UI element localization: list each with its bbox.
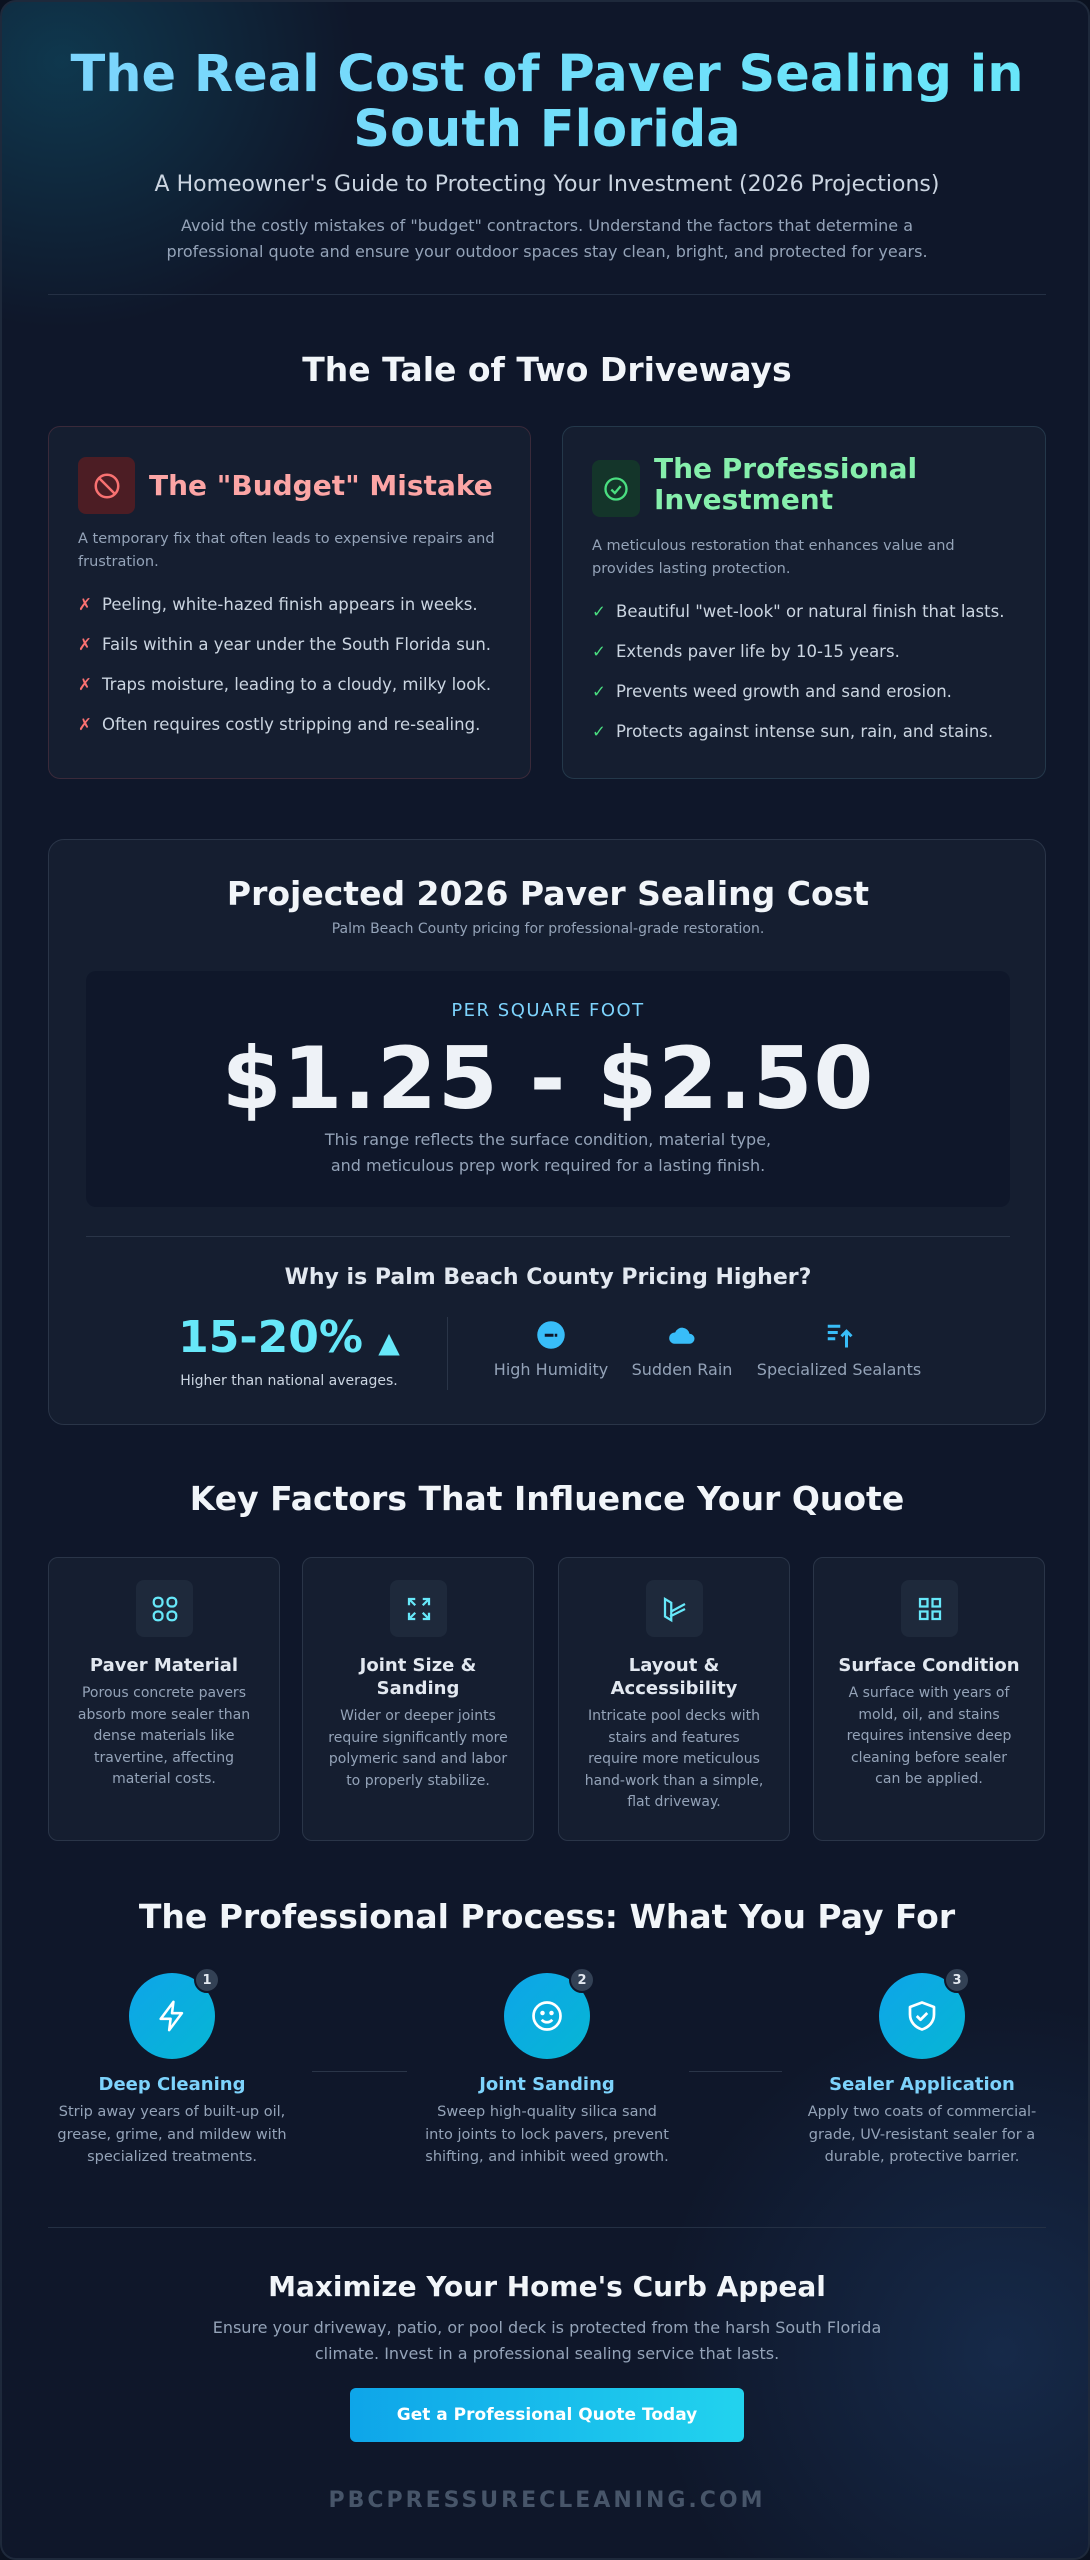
- step 2: Sweep high-quality silica sand: [437, 2104, 657, 2120]
- factor: joint size: Wider or deeper joints require significantly more polymeric sand and labor to properly stabilize.: [328, 1708, 508, 1788]
- panel: budget mistake: [48, 426, 531, 779]
- title: South Florida: [353, 100, 741, 159]
- icon: sealants: [757, 1324, 921, 1379]
- title: [2, 47, 1090, 157]
- list: problems: ✗: [78, 675, 92, 694]
- list: problems: ✗: [78, 715, 92, 734]
- cost subheading: Palm Beach County pricing for professional-grade restoration.: [332, 921, 764, 937]
- factor: layout: Intricate pool decks with stairs and features require more meticulous hand-work than a simple, flat driveway.: [585, 1708, 763, 1810]
- step 3: durable, protective barrier.: [825, 2149, 1019, 2165]
- card description: A temporary fix that often leads to expensive repairs and frustration.: [78, 531, 495, 570]
- price note: [324, 1130, 771, 1175]
- step 2: into joints to lock pavers, prevent: [425, 2126, 669, 2142]
- factor: layout: Accessibility: [611, 1678, 737, 1699]
- button: CTA: Get a Professional Quote Today: [397, 2405, 697, 2425]
- label: PER SQUARE FOOT: [451, 1000, 645, 1021]
- title: The Real Cost of Paver Sealing in: [70, 45, 1024, 104]
- price note: This range reflects the surface condition, material type,: [325, 1130, 771, 1149]
- factor: layout: [558, 1557, 790, 1841]
- factor: joint size: [302, 1557, 534, 1841]
- factor: surface condition: Surface Condition: [838, 1655, 1020, 1676]
- icon: sealants: Specialized Sealants: [757, 1360, 921, 1379]
- panel: professional investment: [562, 426, 1046, 779]
- step 2: Joint Sanding: [479, 2074, 615, 2095]
- intro paragraph: [166, 216, 928, 261]
- intro paragraph: Avoid the costly mistakes of "budget" contractors. Understand the factors that determine a: [181, 216, 913, 235]
- icon: prohibited: [78, 457, 135, 514]
- step 1: Deep Cleaning: [99, 2074, 245, 2095]
- icon: shield: [879, 1973, 965, 2059]
- list: problems: Often requires costly stripping and re-sealing.: [102, 715, 480, 734]
- factor: layout: Layout &: [629, 1655, 719, 1676]
- icon: lightning: [129, 1973, 215, 2059]
- factor: joint size: Joint Size &: [360, 1655, 476, 1676]
- intro paragraph: professional quote and ensure your outdoor spaces stay clean, bright, and protected for years.: [166, 242, 928, 261]
- step 2: 2: [577, 1972, 587, 1988]
- factor: paver material: Porous concrete pavers absorb more sealer than dense materials like travertine, affecting material costs.: [78, 1685, 250, 1787]
- why heading: Why is Palm Beach County Pricing Higher?: [285, 1265, 811, 1290]
- closing paragraph: climate. Invest in a professional sealing service that lasts.: [315, 2344, 779, 2363]
- factor: joint size: Sanding: [377, 1678, 459, 1699]
- list: benefits: Prevents weed growth and sand erosion.: [616, 682, 952, 701]
- list: benefits: Beautiful "wet-look" or natural finish that lasts.: [616, 602, 1004, 621]
- button: CTA: [350, 2388, 744, 2442]
- step 1: specialized treatments.: [87, 2149, 257, 2165]
- list: problems: ✗: [78, 595, 92, 614]
- heading: curb appeal: Maximize Your Home's Curb Appeal: [268, 2270, 826, 2303]
- factor: surface condition: [813, 1557, 1045, 1841]
- factor: surface condition: A surface with years of mold, oil, and stains requires intensive deep cleaning before sealer can be applied.: [847, 1685, 1011, 1787]
- price box: [86, 971, 1010, 1207]
- icon: humidity: High Humidity: [494, 1360, 608, 1379]
- step 3: Apply two coats of commercial-: [808, 2104, 1036, 2120]
- step 2: [425, 1969, 669, 2165]
- list: benefits: ✓: [592, 602, 606, 621]
- list: problems: [78, 595, 491, 734]
- card title: [654, 452, 917, 516]
- heading: professional process: The Professional Process: What You Pay For: [139, 1897, 955, 1936]
- closing paragraph: [213, 2318, 881, 2363]
- factor: paver material: Paver Material: [90, 1655, 238, 1676]
- step 2: shifting, and inhibit weed growth.: [425, 2149, 669, 2165]
- stat: 15-20%: Higher than national averages.: [180, 1373, 398, 1389]
- footer: website: PBCPRESSURECLEANING.COM: [328, 2488, 766, 2513]
- list: problems: ✗: [78, 635, 92, 654]
- step 1: grease, grime, and mildew with: [57, 2126, 287, 2142]
- list: benefits: [592, 602, 1004, 741]
- card title: The "Budget" Mistake: [149, 469, 493, 502]
- card title: Investment: [654, 483, 833, 516]
- panel: projected cost: [48, 839, 1046, 1425]
- list: problems: Peeling, white-hazed finish appears in weeks.: [102, 595, 478, 614]
- step 1: [57, 1969, 287, 2165]
- list: benefits: ✓: [592, 722, 606, 741]
- step 3: [808, 1969, 1036, 2165]
- icon: smile: [504, 1973, 590, 2059]
- icon: humidity: [494, 1321, 608, 1379]
- step 3: 3: [952, 1972, 962, 1988]
- card title: The Professional: [654, 452, 917, 485]
- heading: tale of two driveways: The Tale of Two Driveways: [302, 350, 792, 389]
- step 1: Strip away years of built-up oil,: [59, 2104, 285, 2120]
- step 3: Sealer Application: [829, 2074, 1015, 2095]
- step 3: grade, UV-resistant sealer for a: [809, 2126, 1035, 2142]
- stat: 15-20%: 15-20% ▲: [178, 1312, 400, 1363]
- list: problems: Fails within a year under the South Florida sun.: [102, 635, 491, 654]
- icon: rain: [632, 1328, 732, 1379]
- cost heading: Projected 2026 Paver Sealing Cost: [227, 874, 869, 913]
- list: benefits: ✓: [592, 682, 606, 701]
- icon: check: [592, 460, 640, 517]
- icon: rain: Sudden Rain: [632, 1360, 732, 1379]
- list: benefits: ✓: [592, 642, 606, 661]
- list: benefits: Extends paver life by 10-15 years.: [616, 642, 900, 661]
- list: problems: Traps moisture, leading to a cloudy, milky look.: [102, 675, 491, 694]
- price note: and meticulous prep work required for a lasting finish.: [331, 1156, 765, 1175]
- price range: $1.25 - $2.50: [222, 1029, 874, 1129]
- stat: 15-20%: [178, 1312, 400, 1389]
- step 1: 1: [202, 1972, 212, 1988]
- factor: paver material: [48, 1557, 280, 1841]
- list: benefits: Protects against intense sun, rain, and stains.: [616, 722, 993, 741]
- closing paragraph: Ensure your driveway, patio, or pool deck is protected from the harsh South Florida: [213, 2318, 881, 2337]
- card description: A meticulous restoration that enhances value and provides lasting protection.: [592, 538, 955, 577]
- subtitle: A Homeowner's Guide to Protecting Your Investment (2026 Projections): [155, 172, 939, 197]
- heading: key factors: Key Factors That Influence Your Quote: [190, 1479, 904, 1518]
